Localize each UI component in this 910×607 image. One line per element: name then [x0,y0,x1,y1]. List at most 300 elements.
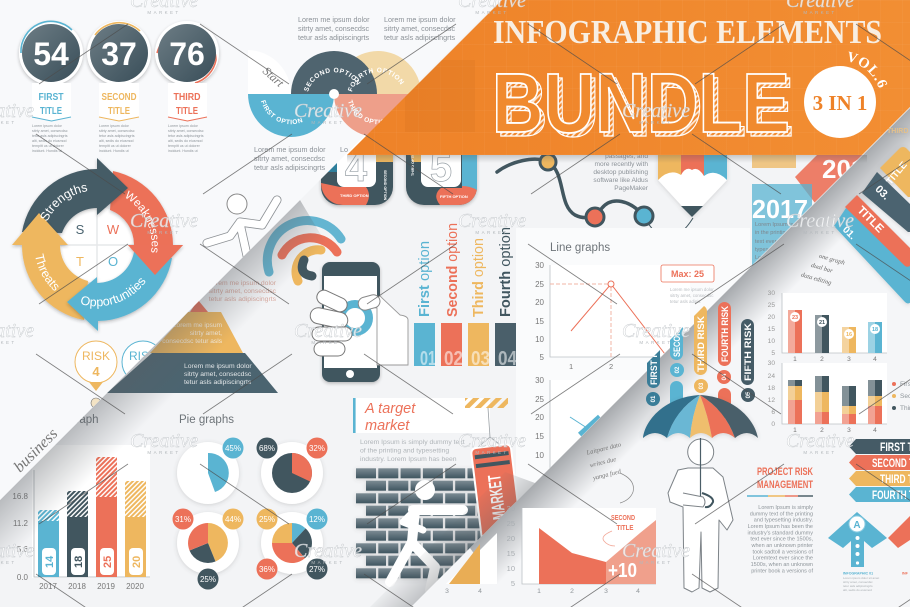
watermarks: MARKET [475,230,509,235]
handwriting note: line graph: Laitpare dato [585,441,623,457]
panel: badge title tabs: TITLE [108,106,130,117]
chart: stacked columns top: 16 [846,332,852,338]
text block: badge lorem [32,124,204,153]
icon: rainbow arcs [267,221,341,281]
chart: stacked columns top: 23 [792,315,798,321]
panel: line graphs background [516,228,750,502]
watermarks: Creative [130,210,198,232]
chart: area graph two: 1 [537,588,541,595]
text block: top lorem columns: tetur asls adipiscingrts [254,163,326,172]
panel: badge title tabs: SECOND [102,92,136,103]
chart: line graph two: 15 [535,432,545,441]
text block: timeline caption: passages, and [605,153,648,160]
icon: up arrow A [828,512,887,592]
handwriting note: line graph: writes due [589,456,617,469]
text block: project risk body: dummy text of the printing [750,511,813,517]
text block: badge lorem: sitrty amet, consecdsc [32,129,68,133]
text block: badge lorem: tetur asls adipiscingrts [99,134,135,138]
text block: pyramid top caption: tetur asls adipiscingrts [209,296,277,303]
icon: up arrow A: A [853,520,861,531]
text block: top lorem columns: Lo [340,145,348,154]
chart: pie graphs: 25% [259,515,275,524]
list: vertical options [416,223,514,317]
icon: up arrow A: INFOGRAPHIC 01 [843,572,873,576]
text block: badge lorem: alit, sedis do eiusmod [99,139,134,143]
chart: stacked columns bottom: 4 [873,427,877,434]
chart: bar graph: 2019 [97,582,115,591]
watermarks: MARKET [803,450,837,455]
chart: stacked columns top: 21 [819,320,825,326]
chart: pie graphs: Pie graphs [179,414,234,426]
watermarks: MARKET [475,450,509,455]
chart: stacked columns top: 5 [771,350,775,357]
watermarks: Creative [294,540,362,562]
chart: SWOT cycle: S [76,222,85,237]
text block: timeline caption [593,153,649,192]
panel: badge title tabs: TITLE [176,106,198,117]
panel: badge title tabs [32,83,207,121]
watermarks: MARKET [311,560,345,565]
text block: project risk body [747,505,813,574]
chart: bar graph: 14 [44,555,56,568]
chart: pie graphs [172,414,328,590]
text block: badge lorem: sitrty amet, consecdsc [99,129,135,133]
watermarks: MARKET [475,10,509,15]
list: vertical risk pills: 03 [699,382,705,389]
panel: half circle options: THIRD OPTION [348,100,383,124]
icon: risk pins: RISK [129,349,157,363]
chart: stacked columns bottom: 0 [771,421,775,428]
text block: badge lorem: incidunt. Hundis ut [168,149,198,153]
heading: a target market: market [365,418,410,434]
callout: max value: tetur asls adipis [670,299,701,304]
chart: stacked columns top: 1 [793,356,797,363]
chart: stacked columns top: 30 [768,290,775,297]
panel: timeline years: 2016 [822,154,880,184]
watermarks: Creative [458,430,526,452]
panel: half circle options: FIRST OPTION [261,100,303,124]
chart: pyramid: sitrty amet, consecdsc [184,371,252,378]
chart: stacked columns top: 25 [768,302,775,309]
text block: badge lorem: tempitt us ut dolorer [32,144,65,148]
icon: pencil [658,150,727,217]
watermarks: Creative [622,540,690,562]
fold shadow: right diagonal upper [470,108,910,590]
watermarks: MARKET [803,230,837,235]
icon: umbrella [643,395,758,438]
watermarks: MARKET [147,10,181,15]
panel: half circle options: Start [260,64,287,90]
handwriting note: line graph: yanga fued [591,468,623,482]
fold shadow: right diagonal lower [370,472,535,607]
list: vertical risk pills: FIFTH RISK [743,323,754,381]
chart: stacked columns bottom: 6 [771,409,775,416]
icon: up arrow A: alit, sedis do eiusmod [843,588,872,592]
chart: pie graphs: 68% [259,444,275,453]
chart: numbered option boxes: 02 [444,348,463,370]
panel: rounded number square 4: SECOND OPTION [383,170,387,201]
text block: badge lorem: tetur asls adipiscingrts [32,134,68,138]
arrow: curved handwriting [620,473,633,503]
chart: bar graph: 2020 [126,582,144,591]
icon: up arrow A: tetur asls adipiscingrts [843,584,873,588]
chart: line graph one: 1 [569,362,573,371]
chart: line graph one: 20 [535,298,545,307]
text block: project risk body: Lorem Ipsum has been the [748,524,813,530]
panel: number badges [19,21,219,85]
chart: SWOT cycle: Opportunities [81,278,146,309]
chart: area graph two: 25 [507,519,515,528]
chart: SWOT cycle: Strengths [40,185,88,221]
text block: project risk body: took sadtoll a versions of [752,549,813,555]
panel: lower right sheet [411,107,910,607]
text block: timeline caption: software like Aldus [593,177,649,184]
panel: rounded number square 4: 4 [345,146,368,190]
chart: ribbon titles: TITLE [855,204,886,236]
list: vertical options: First option [416,241,433,317]
chart: bar graph: Bar graph [48,414,99,426]
chart: bar graph: 2018 [68,582,86,591]
icon: hanging market ticket [471,408,523,548]
chart: pyramid: consecdsc tetur asls [162,338,223,345]
chart: bar graph: 5.6 [17,545,29,554]
chart: stacked columns bottom: 12 [768,397,775,404]
text block: project risk body: text ever since the 1500s, [750,537,813,543]
icon: up arrow A: sitrty amet, consecdsc [843,580,873,584]
panel: timeline years: industry's standard [755,263,802,269]
callout: max value: Lorem me ipsum dolor [670,287,714,292]
icon: walking person [390,480,463,590]
panel: badge title tabs: THIRD [174,92,200,103]
text block: top lorem columns: Lorem me ipsum dolor [298,15,370,24]
list: vertical options: Fourth option [497,227,514,317]
chart: bar graph [12,414,150,591]
chart: pyramid: sitrty amet, [190,330,222,337]
heading: a target market: industry. Lorem Ipsum has been [360,456,457,463]
watermarks: MARKET [639,120,673,125]
icon: up arrow A: Lorem ipsum dolor sit amet [843,576,879,580]
chart: pie graphs: 31% [175,515,191,524]
panel: badge title tabs: FIRST [38,92,64,103]
chart: SWOT cycle: Weaknesses [126,190,158,253]
chart: numbered option boxes: 01 [420,348,436,370]
panel: rounded number square 5: 5 [430,146,452,190]
panel: half circle options: SECOND OPTION [304,68,361,92]
chart: area graph one [445,533,497,595]
heading: a target market: Lorem Ipsum is simply dummy text [360,439,465,446]
chart: bar graph: 18 [73,556,85,568]
panel: rounded number square 5 [406,130,477,205]
icon: person with umbrella outline [668,438,733,592]
chart: area graph two: 3 [604,588,608,595]
panel: rounded number square 5: THIRD OPTION [411,150,415,176]
watermarks: Creative [622,100,690,122]
text block: top lorem columns: tetur asls adipiscingrts [298,33,370,42]
panel: number badges: 76 [169,36,205,72]
handwriting note: graph: dual bar [810,262,834,275]
chart: area graph one: 3 [445,588,449,595]
handwritten word: business: business [11,425,61,476]
chart: pie graphs: 36% [259,565,275,574]
chart: pyramid: Lorem me ipsum dolor [184,363,252,370]
text block: top lorem columns: sitrty amet, consecdsc [298,24,370,33]
chart: stacked columns top: 15 [768,326,775,333]
watermarks: MARKET [639,340,673,345]
chart: line graph two: 20 [535,413,545,422]
panel: timeline years: typesetting of [755,247,789,253]
legend: stacked columns [892,381,910,412]
chart: line graph one [535,242,690,371]
chart: bar graph: 2017 [39,582,57,591]
chart: bar graph: 11.2 [13,519,29,528]
chart: pyramid: Lorem me ipsum [173,322,223,329]
watermarks: Creative [622,320,690,342]
list: vertical risk pills: 02 [675,366,681,373]
chart: line graph one: Line graphs [550,242,610,254]
handwriting note: graph: data editing [800,271,833,287]
chart: pyramid: tetur asls adipiscingrts [184,379,252,386]
watermarks: MARKET [803,10,837,15]
panel: rounded number square 4 [321,130,393,205]
text block: top lorem columns: tetur asls adipiscingrts [384,33,456,42]
chart: pie graphs: 27% [309,565,325,574]
heading: a target market: of the printing and typesetting [360,448,449,454]
icon: red arrow partial [888,516,910,576]
chart: ribbon titles: TITLE [884,160,910,187]
text block: timeline caption: PageMaker [614,185,649,192]
banner word: BUNDLE: BUNDLE [492,56,790,150]
panel: timeline years: Lorem Ipsum has [755,255,798,261]
chart: area graph two: TITLE [616,523,634,532]
banner shadow [347,155,867,163]
chart: numbered option boxes: 03 [471,348,490,370]
heading: project risk management: PROJECT RISK [757,466,813,478]
handwriting note: graph: one graph [818,253,845,267]
panel: timeline years: text ever since [755,239,791,245]
chart: SWOT cycle: W [107,222,120,237]
chart: area graph two: 15 [507,549,515,558]
chart: SWOT cycle [12,158,184,333]
watermarks: Creative [458,210,526,232]
chart: stacked columns top: 10 [768,338,775,345]
chart: numbered option boxes [414,323,516,366]
text block: badge lorem: sitrty amet, consecdsc [168,129,204,133]
list: vertical risk pills: SECOND [672,325,683,357]
text block: project risk body: 1500s, when an unknown [751,562,813,568]
text block: badge lorem: alit, sedis do eiusmod [168,139,203,143]
text block: top lorem columns: sitrty amet, consecdsc [384,24,456,33]
text block: pyramid top caption: Lorem me ipsum dolor [208,280,277,287]
watermarks: Creative [294,320,362,342]
handwriting note: line graph [585,441,629,482]
text block: badge lorem: tempitt us ut dolorer [168,144,201,148]
list: vertical risk pills: THIRD RISK [696,316,707,372]
icon: running person outline [207,194,277,260]
chart: SWOT cycle: Threats [36,253,58,291]
text block: badge lorem: tetur asls adipiscingrts [168,134,204,138]
text block: top lorem columns [254,15,456,172]
panel: timeline years: 2017 [752,194,808,224]
panel: rounded number square 5: FIFTH OPTION [440,194,468,199]
text block: badge lorem: incidunt. Hundis ut [32,149,62,153]
callout: max value: Max: 25 [671,269,704,279]
chart: pie graphs: 44% [225,515,241,524]
chart: line graph one: 10 [535,335,545,344]
watermarks: MARKET [147,450,181,455]
chart: pie graphs: 12% [309,515,325,524]
chart: area graph two: 5 [511,579,515,588]
icon: risk pins [75,341,164,408]
chart: bar graph: 0.0 [17,573,29,582]
chart: ribbon titles: 01. [840,224,858,242]
banner word: BUNDLE shadow: BUNDLE [496,60,794,154]
chart: stacked columns bottom: 30 [768,360,775,367]
chart: area graph two: 20 [507,534,515,543]
panel: number badges: 54 [33,36,69,72]
callout: max value: sitrty amet, consecdsc [670,293,714,298]
chart: line graph two: 30 [535,376,545,385]
watermarks: MARKET [311,120,345,125]
icon: risk pins: 4 [92,364,100,379]
panel: top left sheet [0,0,500,500]
text block: project risk body: and typesetting industry. [754,518,813,524]
chart: stacked columns top [768,290,887,363]
chart: stacked columns top: 4 [873,356,877,363]
heading: project risk management: MANAGEMENT [757,479,813,491]
text block: top lorem columns: sitrty amet, consecdsc [254,154,326,163]
list: arrow banners [849,439,910,502]
icon: hanging market ticket: MARKET [484,474,510,521]
chart: stacked columns top: 2 [820,356,824,363]
chart: pyramid [107,300,278,393]
text block: project risk body: printer book a versions of [751,568,813,574]
chart: area graph two: 4 [636,588,640,595]
panel: timeline years: dummy text ever [755,271,796,277]
chart: pie graphs: 45% [225,444,241,453]
chart: stacked columns bottom: 24 [768,373,775,380]
chart: line graph one: 3 [648,362,652,371]
chart: area graph two: +10 [608,560,637,582]
list: vertical risk pills: 01 [651,395,657,402]
list: vertical risk pills: 04 [722,373,728,380]
heading: a target market: A target [364,401,416,417]
panel: timeline years: Lorem Ipsum is [755,222,793,228]
text block: project risk body: Loremtext ever since the [753,556,813,562]
chart: stacked columns top: 18 [872,327,878,333]
icon: hand holding phone [309,262,408,382]
text block: badge lorem: Lorem ipsum dolor [99,124,130,128]
badge: 3 in 1 [804,66,876,138]
chart: ribbon titles: THIRD [887,128,908,135]
chart: line graph one: 15 [535,317,545,326]
chart: ribbon titles [834,128,910,304]
chart: area graph one: 4 [478,588,482,595]
chart: line graph one: 5 [540,353,545,362]
text block: project risk body: when an unknown printer [751,543,813,549]
chart: curved timeline [497,154,693,238]
chart: stacked columns bottom: 2 [820,427,824,434]
text block: badge lorem: Lorem ipsum dolor [168,124,199,128]
chart: area graph two [507,504,656,595]
panel: rounded number square 4: THIRD OPTION [340,193,369,198]
chart: line graph one: 2 [609,362,613,371]
chart: area graph two: 10 [507,564,515,573]
text block: pyramid top caption: sitrty amet, consecdsc [209,288,277,295]
chart: line graph two [535,376,640,480]
chart: bar graph: 20 [131,556,143,568]
panel: timeline years: in the printing [755,230,789,236]
heading: a target market [353,398,508,463]
callout: max value [661,265,714,304]
chart: line graph two: 10 [535,451,545,460]
chart: numbered option boxes: 04 [498,348,518,370]
chart: area graph two: 30 [507,504,515,513]
list: vertical risk pills [646,302,755,421]
chart: line graph two: 25 [535,395,545,404]
chart: stacked columns bottom [768,360,887,434]
chart: stacked columns top: 3 [847,356,851,363]
chart: bar graph: 25 [102,556,114,568]
icon: risk pins: RISK [82,349,110,363]
watermarks: MARKET [639,560,673,565]
badge: 3 in 1: 3 IN 1 [813,91,867,115]
watermarks: Creative [786,430,854,452]
panel: timeline years [752,155,862,265]
text block: timeline caption: desktop publishing [593,169,648,176]
banner: orange title band [347,0,910,155]
chart: pie graphs: 32% [309,444,325,453]
chart: pie graphs: 25% [200,575,216,584]
text block: timeline caption: more recently with [594,161,648,168]
chart: line graph one: 30 [535,261,545,270]
chart: area graph two: SECOND [611,513,635,522]
badge text: Vol. 6: VOL.6 [848,52,888,88]
chart: ribbon titles: 03. [872,183,892,203]
chart: SWOT cycle: O [108,254,118,269]
watermarks: Creative [130,430,198,452]
list: vertical risk pills: FOURTH RISK [720,306,731,362]
chart: area graph two: 2 [570,588,574,595]
text block: project risk body: Lorem Ipsum is simply [758,505,813,511]
text block: badge lorem: Lorem ipsum dolor [32,124,63,128]
heading: project risk management [747,466,813,496]
text block: badge lorem: tempitt us ut dolorer [99,144,132,148]
chart: SWOT cycle: T [76,254,84,269]
list: vertical risk pills: 05 [746,391,752,398]
icon: brick wall [356,468,498,578]
chart: stacked columns bottom: 18 [768,385,775,392]
chart: stacked columns bottom: 3 [847,427,851,434]
panel: half circle options [248,51,420,137]
text block: project risk body: industry's standard dummy [747,530,813,536]
watermarks: MARKET [147,230,181,235]
text block: badge lorem: incidunt. Hundis ut [99,149,129,153]
chart: line graph one: 25 [535,280,545,289]
list: vertical risk pills: FIRST RISK [649,337,660,385]
text block: pyramid top caption [208,280,277,303]
fold shadow: left diagonal [0,200,360,607]
watermarks: Creative [294,100,362,122]
watermarks: Creative [786,210,854,232]
handwriting note: graph [800,249,845,289]
panel: badge title tabs: TITLE [40,106,62,117]
chart: stacked columns bottom: 1 [793,427,797,434]
watermarks: MARKET [311,340,345,345]
text block: top lorem columns: Lorem me ipsum dolor [254,145,326,154]
panel: half circle options: FOURTH OPTION [348,68,404,92]
panel: number badges: 37 [101,36,137,72]
chart: stacked columns top: 20 [768,314,775,321]
